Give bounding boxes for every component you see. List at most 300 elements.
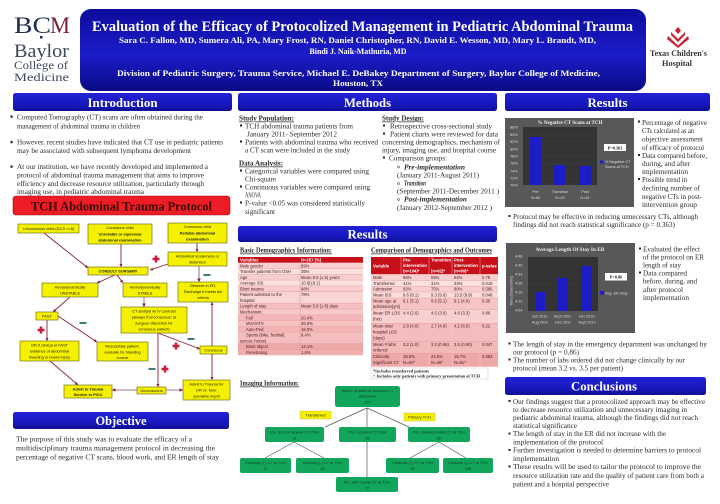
table: comparison of demographics and outcomes [371,257,498,367]
results text: length of stay and labs [508,340,707,372]
table: basic demographics: Sports (bike, football, [246,333,285,338]
objective text [16,436,219,462]
objective text: The purpose of this study was to evaluate the efficacy of a [16,436,193,444]
tree diagram: imaging information [240,386,493,492]
node: clinically negative transferred: 33 [320,466,325,471]
methods: study population and data analysis: Categorical variables were compared using [245,168,369,176]
heading: Results (center): Results [348,228,388,242]
table: comparison of demographics and outcomes: (hrs) [373,316,382,322]
table: comparison of demographics and outcomes: 0.586 [482,287,493,292]
logo: Baylor College of Medicine [14,13,70,84]
logo: Texas Children's Hospital [650,27,707,68]
introduction text: may be associated with subsequent lymphoma development [17,147,191,155]
y axis labels: 4:19 [515,290,522,294]
plus and minus markers [38,256,210,372]
heading: Methods: Methods [344,95,391,110]
table: comparison of demographics and outcomes: Pre- [403,258,412,262]
methods: study population and data analysis: a CT scan were included in the study [245,146,350,154]
node: clinically positive transferred [240,458,291,473]
logo: Baylor College of Medicine: Baylor [14,41,70,62]
methods: study population and data analysis: significant [245,208,275,216]
conclusions text: Our findings suggest that a protocolized approach may be effective [513,398,705,406]
box: hemodynamically unstable [42,283,98,297]
p-value box: P=0.363 [608,145,622,150]
heading: Introduction: Introduction [88,95,158,110]
table: comparison of demographics and outcomes: Male [373,275,383,280]
methods: study design: Retrospective cross-sectional study [390,122,492,130]
p-value box: P=0.86 [610,274,622,280]
conclusions text: Further investigation is needed to determine barriers to protocol [513,446,701,454]
table: comparison of demographics and outcomes: (days) [373,336,385,340]
results text: negative CT bullets: Percentage of negative [642,119,707,127]
table: basic demographics: Patient admitted to the [240,292,283,297]
table: basic demographics: Mean 8.9 (± 5) years [301,275,340,280]
x axis labels: Transition [552,190,568,194]
table: comparison of demographics and outcomes: 4.4 (2.6) [403,310,419,316]
table: comparison of demographics and outcomes: Mean total [373,324,393,328]
table: basic demographics: 78% [301,292,310,297]
table: comparison of demographics and outcomes: ordered [373,348,388,352]
node: clinically negative transferred: Clinically (-) CT at TCH [303,460,343,465]
box: OR if clinical or FAST: bleeding or bowel injury [29,354,70,360]
methods: study population and data analysis: ANOVA [245,192,262,200]
heading: Methods [238,93,497,111]
y axis labels: 78% [510,154,518,158]
box: abdominal tenderness: distention [189,260,206,264]
y axis labels: 86% [510,126,518,130]
results text: negative CT bullets: declining number of [642,184,701,192]
node: clinically negative primary: Clinically (-) CT at TCH [448,460,488,465]
box: resuscitate patient: Resuscitate patient, [105,344,140,348]
node: clinically positive primary: 32 [410,466,415,471]
objective text: percentage of negative CT scans, blood work, and ER length of stay [16,454,219,462]
node: received initial CT at TCH: 167 [436,436,442,440]
box: CT abd/pel [121,307,187,333]
table: comparison of demographics and outcomes: 59% [431,275,440,280]
legend: % Negative CT [605,160,631,164]
table: comparison of demographics and outcomes: Mean ISS [373,293,392,298]
conclusions text: pediatric abdominal trauma, although the findings did not reach [513,414,698,422]
box: consult surgery: CONSULT SURGERY [99,268,138,274]
box: unconscious: Unconscious [140,388,163,393]
x axis labels: N=81 [580,196,590,200]
results text: ER stay bullets: of the protocol on ER [643,254,704,262]
x axis labels [531,190,590,200]
methods: study population and data analysis: Chi-square [245,176,276,184]
box: conscious child reliable: Conscious child [184,224,211,229]
node: received CT OSH: Pts. received CT OSH [348,430,387,434]
introduction text: However, recent studies have indicated that CT use in pediatric patients [17,138,223,146]
y axis labels: 76% [510,162,518,166]
x axis labels: Dec 2011 [555,320,571,324]
table footnotes [371,368,488,379]
box: admit to trauma for OR: operative mgmt [193,394,221,398]
table: comparison of demographics and outcomes: p-value [482,264,497,268]
node: clinically positive primary: Clinically (+) CT at TCH [392,460,433,465]
table: comparison of demographics and outcomes: hospital LOS [373,330,397,334]
table: comparison of demographics and outcomes: 9.5 (5.1) [431,299,447,304]
x axis labels: Post [581,190,590,194]
node: total patients: abd/pelvis [359,394,376,398]
box: hemodynamically unstable: UNSTABLE [60,290,81,296]
table: comparison of demographics and outcomes: Transferred [373,281,395,286]
table: comparison of demographics and outcomes: admission(yrs) [373,304,401,309]
introduction text: At our institution, we have recently developed and implemented a [17,163,209,171]
methods: study design: (September 2011-December 2011 ) [397,188,500,196]
table: basic demographics: Transfer patients from OSH [240,269,291,274]
y axis labels: 80% [510,148,518,152]
results text: negative CT bullets: Data compared before, [642,152,707,160]
methods: study design: Pre-implementation [404,164,465,172]
table: basic demographics: MVA/ATV [246,321,264,326]
x axis labels [532,314,596,324]
node: did not receive CT: 31 [292,436,297,440]
label: primary TCH: Primary TCH [408,414,431,420]
methods: study design: Patient charts were reviewed for data [390,130,499,138]
table: comparison of demographics and outcomes: 3.2 (1.0) [403,342,419,347]
conclusions text: implementation of the protocol [513,438,603,446]
box: CT abd/pel: conscious patient) [138,326,170,332]
methods: study design: injury, imaging use, and hospital course [382,146,496,154]
conclusions text: resource utilization rate and the quality of patient care from both a [513,472,705,480]
y axis labels: 84% [510,133,518,137]
authors [119,35,596,56]
y axis labels: 4:40 [515,264,522,268]
node: did not receive CT [265,427,324,442]
x axis labels: N=49 [555,196,565,200]
heading: TCH Abdominal Trauma Protocol: TCH Abdominal Trauma Protocol [31,198,212,214]
table: comparison of demographics and outcomes: 65% [403,275,412,280]
results text: negative CT bullets: objective assessment [642,136,703,144]
heading: Results: Results [588,95,628,110]
box: FAST [36,312,58,320]
heading: Imaging Information: Imaging Information: [240,380,299,388]
x axis labels: N=84 [531,196,540,200]
table: basic demographics: Penetrating [246,350,268,355]
table: comparison of demographics and outcomes: 0.363 [482,354,493,359]
y axis labels: 4:48 [515,254,522,258]
table: comparison of demographics and outcomes: 2.8 (4.0) [403,324,419,328]
box: resuscitate patient: evaluate for bleeding [104,350,141,354]
heading: Basic Demographics Information: Basic Demographics Information: [240,246,332,254]
box: admit to trauma service in PICU: Service in PICU [74,392,103,397]
table: comparison of demographics and outcomes: intervention [454,263,478,268]
table: basic demographics: 69% [301,263,310,268]
results text: ER stay bullets: implementation [643,294,689,302]
box: conscious [200,346,227,354]
node: received CT OSH [339,427,396,442]
table: comparison of demographics and outcomes: 62% [454,275,463,280]
results text: negative CT bullets: during, and after [642,160,691,168]
table: comparison of demographics and outcomes: 82% [403,287,412,292]
table: basic demographics: Mean 5.8 (± 8) days [301,304,338,309]
table: comparison of demographics and outcomes: 31% [431,281,440,286]
box: resuscitate patient [97,342,148,361]
box: observe in ER: criteria [197,295,210,300]
box: hemodynamically stable: Hemodynamically [130,284,160,290]
methods: study design: Post-implementation [404,196,467,204]
box: conscious child reliable: examination [186,236,209,242]
table: comparison of demographics and outcomes: 24.5% [431,354,443,359]
table: comparison of demographics and outcomes: intervention [403,263,427,268]
flowchart: protocol [18,223,230,400]
table: basic demographics: Auto-Ped [246,327,264,332]
box: unconscious [137,387,166,394]
heading: TCH Abdominal Trauma Protocol [13,196,230,215]
results text: negative CT bullets: implementation [642,168,688,176]
affiliation: Division of Pediatric Surgery, Trauma Service, Michael E. DeBakey Department of Surgery, Baylor College of Medicine, [117,68,600,78]
heading: Conclusions: Conclusions [571,378,637,394]
table: basic demographics: Variables [240,258,259,262]
heading: Results (center) [238,226,497,242]
box: conscious child reliable: Reliable abdominal [180,230,215,236]
logo: Texas Children's Hospital: Texas Children's [650,49,707,58]
conclusions text: to decrease resource utilization and unnecessary imaging in [513,406,687,414]
methods: study population and data analysis: Study Population: [239,114,294,122]
results text: negative CT bullets [638,119,707,209]
authors: Bindi J. Naik-Mathuria, MD [310,46,406,56]
methods: study population and data analysis [239,114,378,216]
authors: Sara C. Fallon, MD, Sumera Ali, PA, Mary Frost, RN, Daniel Christopher, RN, David E. Wesson, MD, Mary L. Brandt, MD, [119,35,596,45]
introduction text: management of abdominal trauma in children [17,122,140,130]
table: comparison of demographics and outcomes: 0.30 [482,299,491,304]
methods: study design: Transition [404,180,426,188]
chart: percent negative CT scans at TCH [505,118,634,207]
node: repeat CT at TCH [336,477,398,492]
results text: protocol effect [508,213,698,229]
table: comparison of demographics and outcomes: 8.1 (5.1) [403,299,419,304]
node: clinically negative primary: 135 [465,466,471,471]
box: abdominal tenderness: Abdominal tenderness or [176,254,220,258]
logo: Baylor College of Medicine: M [50,13,70,38]
node: repeat CT at TCH: 12 [365,486,369,490]
affiliation [117,68,600,88]
table: comparison of demographics and outcomes: 13.5 (9.9) [454,293,473,298]
methods: study population and data analysis: January 2011- September 2012 [247,130,337,138]
box: FAST: FAST [42,314,52,318]
box: OR if clinical or FAST [20,341,79,361]
introduction text: Computed Tomography (CT) scans are often obtained during the [17,114,203,122]
box: conscious child unreliable: abdominal examination [98,238,142,242]
table: comparison of demographics and outcomes: 0.019 [482,281,493,286]
methods: study population and data analysis: TCH abdominal trauma patients from [245,122,353,130]
results text: length of stay and labs: The number of labs ordered did not change clinically by our [513,356,686,364]
table: basic demographics: Blunt trauma [240,286,264,291]
box: conscious: Conscious [204,348,223,352]
table: basic demographics: 98% [301,286,310,291]
heading: Results [505,93,710,111]
table: comparison of demographics and outcomes: 0.048 [482,293,493,298]
table: comparison of demographics and outcomes: 16.7% [454,354,466,359]
node: total patients: Total # of patients received CT [341,388,394,393]
box: OR if clinical or FAST: evidence of abdominal [30,348,69,354]
table: basic demographics: 9.4% [301,333,311,338]
node: received initial CT at TCH [408,427,470,442]
node: repeat CT at TCH: Pts. with repeat CT at TCH [344,480,390,484]
box: consult surgery [88,267,148,275]
y axis labels [510,126,518,188]
results text: protocol effect: findings did not reach statistical significance (p = 0.363) [513,221,676,229]
table: basic demographics: N=257 (%) [301,258,322,262]
table: comparison of demographics and outcomes: 0.86 [482,310,491,316]
table: comparison of demographics and outcomes: 33% [454,281,463,286]
box: observe in ER [178,282,228,302]
box: hemodynamically unstable: Hemodynamically [55,284,85,290]
box: CT abd/pel: (always if unconscious; at [132,314,177,320]
label: primary TCH [404,413,435,421]
box: admit to trauma for OR: OR vs. Non- [196,388,218,392]
heading: Objective [13,412,229,429]
table: basic demographics: Length of stay [240,304,267,309]
y axis labels: 70% [510,184,518,188]
table: basic demographics: Fall [246,315,253,320]
box: conscious child unreliable [88,224,152,244]
chart title: % Negative CT Scans at TCH [538,120,603,126]
header banner [80,9,646,91]
table: basic demographics: Blunt object [246,344,269,349]
table: comparison of demographics and outcomes: (n=104)* [403,268,420,274]
legend: Scans at TCH [605,165,629,169]
conclusions text: These results will be used to tailor the protocol to improve the [513,463,701,471]
conclusions text: implementation [513,455,559,463]
logo: Baylor College of Medicine: College of [14,58,68,72]
box: admit to trauma for OR [183,380,230,400]
box: observe in ER: Observe in ER, [190,283,216,288]
table: comparison of demographics and outcomes: N=84^ [403,360,415,365]
results text: ER stay bullets: length of stay [643,262,681,270]
results text: negative CT bullets: CTs calculated as an [642,127,694,135]
table: basic demographics: 10.6(±9.1) [301,281,321,286]
results text: ER stay bullets [639,246,704,302]
bars [530,137,591,185]
box: conscious child unreliable: Unreliable or equivocal [99,232,141,236]
node: clinically negative transferred [296,458,349,473]
x axis labels: Jan 2012- [579,314,596,318]
title: Evaluation of the Efficacy of Protocolized Management in Pediatric Abdominal Trauma [92,19,633,35]
table footnotes: *Includes transferred patients [373,368,429,374]
y axis labels: 4:04 [515,308,522,312]
logo: Texas Children's Hospital: Hospital [662,59,693,68]
introduction text: imaging use, in pediatric abdominal trauma [17,188,145,196]
methods: study population and data analysis: Continuous variables were compared using [245,184,370,192]
methods: study population and data analysis: Data Analysis: [239,160,283,168]
table: comparison of demographics and outcomes: (n=62)* [431,268,445,274]
box: observe in ER: Discharge if meets d/c [184,289,222,294]
table: comparison of demographics and outcomes: 4.2 (8.0) [454,324,470,328]
box: CT abd/pel: CT abd/pel w/ IV contrast [132,308,177,314]
legend: Avg. ER Stay [605,292,628,296]
table: comparison of demographics and outcomes: Transition [431,258,451,262]
table: basic demographics: soccer, horse) [240,338,267,343]
node: clinically positive transferred: Clinically (+) CT at TCH [245,460,286,465]
logo: Baylor College of Medicine: BC [14,13,51,38]
methods: study population and data analysis: Patients with abdominal trauma who received [245,138,378,146]
table: comparison of demographics and outcomes: 0.22 [482,324,491,328]
table: comparison of demographics and outcomes: 3.3 (0.96) [431,342,450,347]
x axis labels: Sept 2011- [554,314,573,318]
table: comparison of demographics and outcomes: 9.3 (9.6) [431,293,447,298]
x axis labels: Pre [533,190,538,194]
table: basic demographics [238,257,363,355]
results text: ER stay bullets: Data compared [643,270,687,278]
node: received initial CT at TCH: Pts. received initial CT at TCH [413,430,465,434]
table: comparison of demographics and outcomes: Mean # labs [373,342,396,347]
node: total patients: 257 [364,400,371,404]
table: comparison of demographics and outcomes: Mean age at [373,299,397,304]
table: basic demographics: 1.8% [301,350,311,355]
chart title: Average Length Of Stay In ER [536,247,605,253]
methods: study design: (January 2011-August 2011) [397,172,480,180]
introduction text: efficiency and decrease resource utilization, particularly through [17,180,204,188]
methods: study design [382,114,501,212]
table: basic demographics: 20.4% [301,315,313,320]
table: comparison of demographics and outcomes: Variable [373,264,390,268]
table: comparison of demographics and outcomes: Admission [373,287,393,292]
box: admit to trauma for OR: Admit to Trauma for [189,382,224,386]
table: basic demographics: 35% [301,269,310,274]
results text: length of stay and labs: The length of stay in the emergency department was unchanged by [513,340,707,348]
box: resuscitate patient: source [117,355,128,360]
table: basic demographics: Average ISS [240,281,264,286]
methods: study design: (January 2012-September 2012 ) [397,204,493,212]
table: comparison of demographics and outcomes: 4.6 (3.3) [454,310,470,316]
objective text: multidisciplinary trauma management protocol in decreasing the [16,444,215,452]
table: comparison of demographics and outcomes: 3.5 (0.90) [454,342,473,347]
box: conscious child reliable [168,223,227,243]
table: comparison of demographics and outcomes: 41% [403,281,412,286]
conclusions text [508,398,705,488]
box: admit to trauma service in PICU: Admit to Trauma [73,386,104,392]
y axis labels: 4:33 [515,272,522,276]
box: OR if clinical or FAST: OR if clinical or FAST [31,342,69,348]
table: comparison of demographics and outcomes: 19.5% [403,354,415,359]
y axis labels: 4:26 [515,282,522,286]
chart: average length of stay in ER [506,243,635,333]
y axis labels: 72% [510,176,518,180]
results text: ER stay bullets: after protocol [643,286,683,294]
x axis labels: Jan 2011- [532,314,549,318]
table footnotes: ^ Includes only patients with primary presentation at TCH [373,374,481,378]
table: comparison of demographics and outcomes: (n=90)* [454,268,468,274]
results text: negative CT bullets: of efficacy of protocol [642,144,704,152]
table: comparison of demographics and outcomes: 80% [454,287,463,292]
logo: Baylor College of Medicine: Medicine [14,70,69,84]
results text: negative CT bullets: Possible trend in [642,176,687,184]
y axis title: Time (hours:mins) [510,275,514,306]
box: unconscious child: Unconscious child (GCS <=8) [23,226,75,231]
table: basic demographics: 14.1% [301,344,313,349]
methods: study population and data analysis: P-value <0.05 was considered statistically [245,200,365,208]
y axis labels: 4:12 [515,300,522,304]
table: comparison of demographics and outcomes: 9.6 (8.1) [403,293,419,298]
node: clinically negative primary [443,458,493,473]
table: basic demographics: Age [240,275,248,280]
y axis labels: 82% [510,140,518,144]
results text: length of stay and labs: protocol (mean 3.2 vs. 3.5 per patient) [513,364,624,372]
methods: study design: concerning demographics, mechanism of [382,138,501,146]
conclusions text: statistical significance [513,422,577,430]
results text: ER stay bullets: before, during, and [643,278,697,286]
table: basic demographics: Mechanism: [240,310,263,314]
heading: Conclusions [505,377,706,395]
table: comparison of demographics and outcomes: Significant CT [373,360,400,365]
methods: study design: Comparison groups: [389,154,447,162]
table: comparison of demographics and outcomes: 4.5 (3.0) [431,310,447,316]
node: did not receive CT: Pts. did not receive CT OSH [270,430,319,434]
node: clinically positive primary [386,458,439,473]
conclusions text: The length of stay in the ER did not increase with the [513,430,666,438]
introduction text [10,114,223,196]
